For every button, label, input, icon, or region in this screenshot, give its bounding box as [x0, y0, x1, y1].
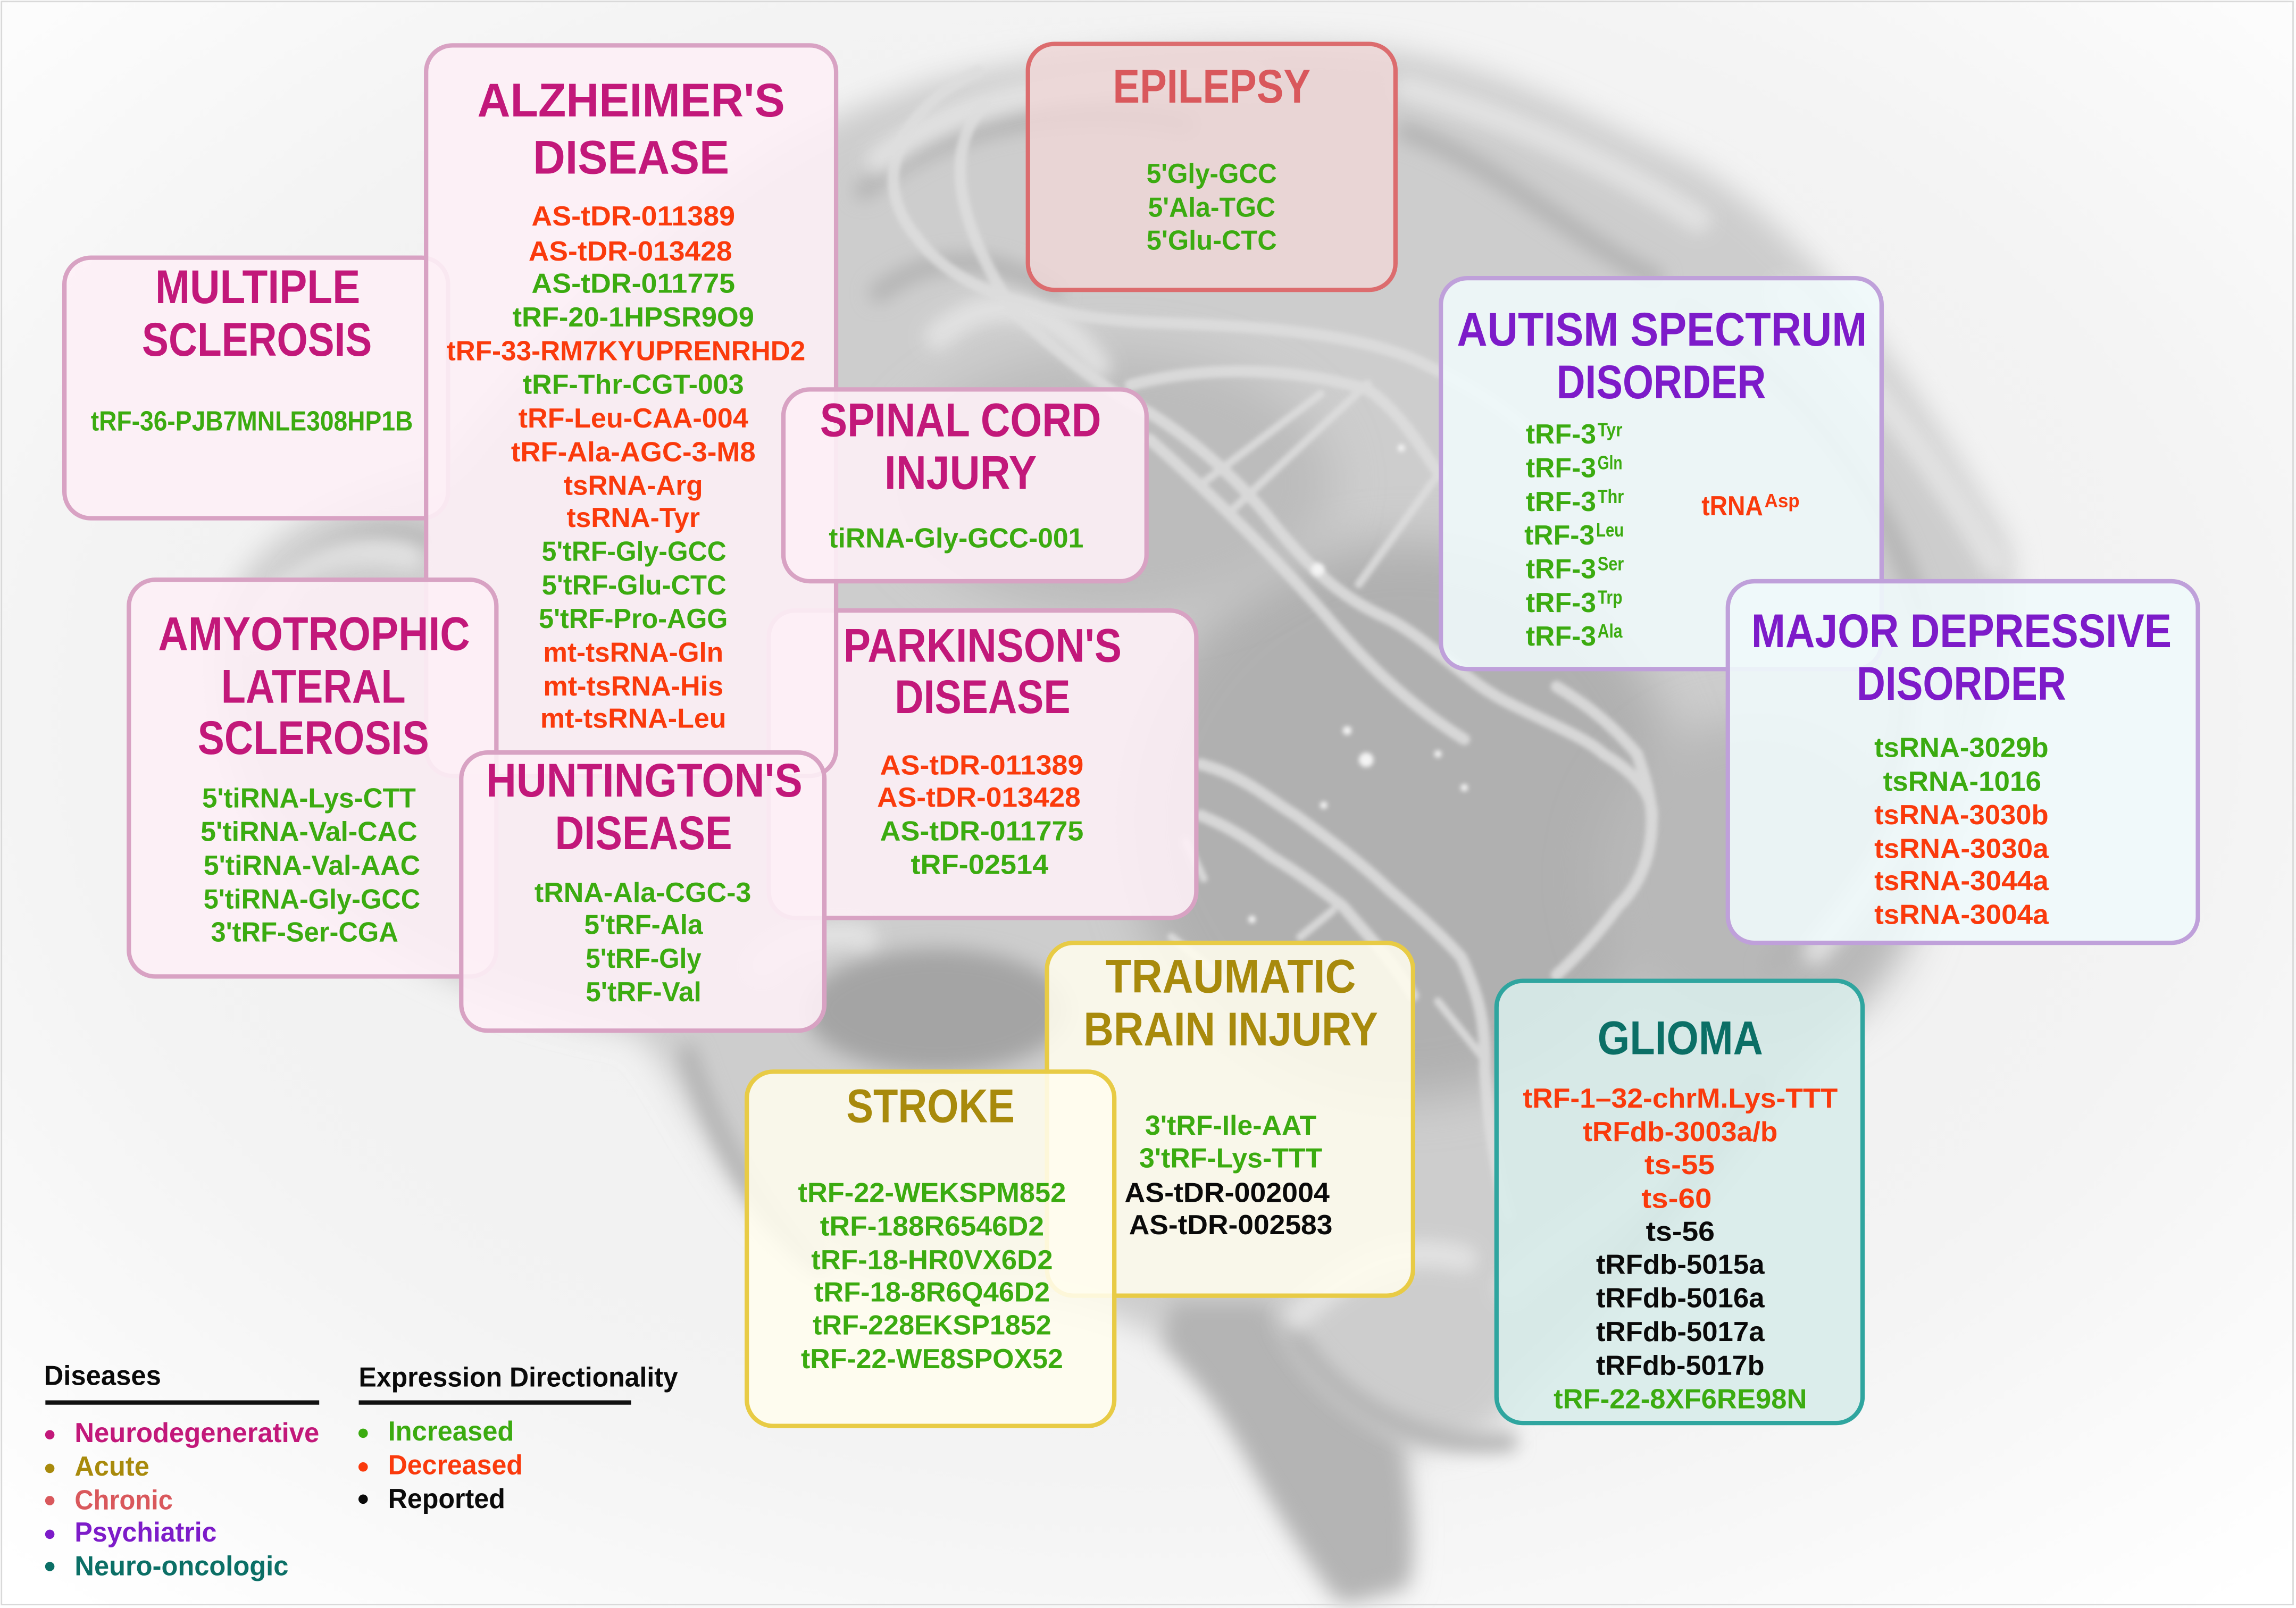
- biomarker list: tRNA-Ala-CGC-3: [535, 877, 751, 908]
- biomarker list: 5'Ala-TGC: [1148, 192, 1275, 223]
- heading: parkinson's disease: [844, 618, 1122, 723]
- biomarker list: ts-56: [1646, 1216, 1715, 1247]
- biomarker list: 3'tRF-Ile-AAT: [1145, 1110, 1316, 1141]
- biomarker list: tsRNA-Tyr: [566, 502, 700, 533]
- biomarker list: tRF-36-PJB7MNLE308HP1B: [91, 406, 413, 437]
- legend: diseases: Diseases: [44, 1361, 161, 1392]
- biomarker: decreased: [1701, 490, 1800, 522]
- legend: diseases: Psychiatric: [74, 1517, 216, 1548]
- biomarker list: tRF-33-RM7KYUPRENRHD2: [447, 336, 805, 366]
- heading: traumatic brain injury: TRAUMATIC: [1106, 950, 1356, 1003]
- biomarker list: tsRNA-3029b: [1874, 732, 2049, 763]
- heading: spinal cord injury: SPINAL CORD: [820, 393, 1101, 446]
- panel: glioma: [1497, 981, 1863, 1423]
- biomarker list: tRF-Ala-AGC-3-M8: [511, 437, 756, 467]
- sparkles: [1248, 445, 1754, 923]
- biomarker list: 5'tRF-Gly: [586, 943, 702, 974]
- biomarker list: increased: tRF-3: [1526, 487, 1596, 517]
- biomarker list: [1147, 158, 1277, 256]
- biomarker list: ts-55: [1644, 1150, 1715, 1180]
- biomarker list: increased: Ala: [1598, 621, 1623, 642]
- heading: traumatic brain injury: BRAIN INJURY: [1083, 1002, 1378, 1056]
- biomarker list: tsRNA-3044a: [1874, 866, 2049, 897]
- dna strands: [894, 72, 1652, 1215]
- biomarker list: 5'tiRNA-Gly-GCC: [204, 884, 420, 915]
- panel: parkinson's disease: [769, 610, 1196, 918]
- biomarker list: tRFdb-5017a: [1596, 1317, 1765, 1347]
- heading: autism spectrum disorder: DISORDER: [1557, 355, 1766, 408]
- biomarker list: tRF-18-HR0VX6D2: [811, 1245, 1053, 1276]
- biomarker list: ts-60: [1641, 1183, 1711, 1214]
- biomarker list: [1124, 1110, 1332, 1241]
- biomarker list: tsRNA-3004a: [1874, 899, 2049, 930]
- biomarker list: 5'tiRNA-Val-CAC: [201, 817, 418, 848]
- biomarker list: tRF-22-WE8SPOX52: [801, 1344, 1063, 1375]
- brain folds: light: [256, 79, 1994, 1318]
- legend: expression directionality: Expression Directionality: [359, 1362, 678, 1393]
- panel: major depressive disorder: [1728, 581, 2198, 943]
- biomarker list: tRF-188R6546D2: [820, 1211, 1044, 1242]
- biomarker list: mt-tsRNA-His: [543, 671, 723, 702]
- heading: alzheimer's disease: DISEASE: [533, 130, 729, 183]
- biomarker list: tRFdb-3003a/b: [1583, 1117, 1777, 1148]
- biomarker list: 5'Glu-CTC: [1147, 225, 1277, 256]
- biomarker list: 5'tiRNA-Val-AAC: [204, 850, 420, 881]
- panel: autism spectrum disorder: [1441, 278, 1882, 669]
- legend: expression directionality: [358, 1362, 678, 1514]
- heading: autism spectrum disorder: AUTISM SPECTRUM: [1457, 303, 1867, 356]
- biomarker list: 3'tRF-Lys-TTT: [1139, 1143, 1322, 1174]
- biomarker list: AS-tDR-002004: [1124, 1177, 1330, 1208]
- biomarker list: increased: tRF-3: [1526, 453, 1596, 484]
- biomarker list: increased: tRF-3: [1526, 588, 1596, 618]
- biomarker list: tiRNA-Gly-GCC-001: [829, 523, 1083, 554]
- biomarker list: tRF-22-WEKSPM852: [798, 1177, 1066, 1208]
- brain stem: [1164, 1303, 1409, 1602]
- heading: amyotrophic lateral sclerosis: AMYOTROPHIC: [158, 607, 470, 660]
- heading: alzheimer's disease: ALZHEIMER'S: [478, 73, 785, 127]
- heading: huntington's disease: [486, 753, 803, 859]
- biomarker list: 5'tiRNA-Lys-CTT: [202, 783, 416, 814]
- biomarker list: mt-tsRNA-Leu: [540, 703, 727, 734]
- biomarker list: increased: Leu: [1596, 520, 1624, 541]
- heading: multiple sclerosis: MULTIPLE: [155, 260, 360, 313]
- biomarker list: [1874, 732, 2049, 930]
- panel: epilepsy: [1028, 44, 1396, 290]
- biomarker list: [798, 1177, 1066, 1375]
- heading: huntington's disease: DISEASE: [555, 806, 732, 859]
- legend: diseases: Neuro-oncologic: [74, 1551, 288, 1581]
- biomarker list: increased: [1524, 419, 1624, 652]
- legend: diseases: Acute: [74, 1451, 149, 1482]
- biomarker list: 5'tRF-Gly-GCC: [542, 537, 727, 567]
- biomarker list: 5'Gly-GCC: [1147, 158, 1277, 189]
- legend: expression directionality: Increased: [388, 1416, 514, 1447]
- biomarker list: AS-tDR-002583: [1129, 1210, 1332, 1241]
- panel: traumatic brain injury: [1047, 943, 1413, 1296]
- biomarker list: increased: Thr: [1598, 486, 1624, 507]
- biomarker list: increased: tRF-3: [1526, 554, 1596, 585]
- biomarker list: 5'tRF-Ala: [585, 910, 703, 941]
- biomarker list: increased: Trp: [1598, 587, 1623, 608]
- biomarker list: tRFdb-5016a: [1596, 1283, 1765, 1314]
- heading: amyotrophic lateral sclerosis: SCLEROSIS: [198, 711, 429, 764]
- panel: multiple sclerosis: [64, 258, 448, 518]
- panel: alzheimer's disease: [426, 45, 836, 776]
- biomarker list: increased: tRF-3: [1526, 621, 1596, 652]
- biomarker: decreased: Asp: [1765, 490, 1800, 512]
- heading: spinal cord injury: INJURY: [884, 446, 1037, 499]
- biomarker list: increased: Tyr: [1598, 419, 1623, 440]
- biomarker: decreased: tRNA: [1701, 491, 1763, 522]
- biomarker list: mt-tsRNA-Gln: [543, 637, 723, 668]
- brain folds: dark: [293, 115, 1921, 1443]
- legend: diseases: [44, 1361, 319, 1581]
- biomarker list: increased: Ser: [1598, 553, 1624, 574]
- biomarker list: 3'tRF-Ser-CGA: [211, 917, 398, 948]
- biomarker list: tRF-Thr-CGT-003: [523, 370, 744, 400]
- legend: expression directionality: Reported: [388, 1484, 505, 1514]
- biomarker list: tRFdb-5015a: [1596, 1249, 1765, 1280]
- biomarker list: AS-tDR-011775: [880, 816, 1083, 847]
- heading: parkinson's disease: PARKINSON'S: [844, 618, 1122, 672]
- panel: huntington's disease: [461, 752, 824, 1031]
- heading: huntington's disease: HUNTINGTON'S: [486, 753, 803, 807]
- heading: major depressive disorder: DISORDER: [1857, 657, 2066, 710]
- biomarker list: [201, 783, 420, 948]
- biomarker list: tRF-18-8R6Q46D2: [814, 1277, 1050, 1308]
- biomarker list: tsRNA-Arg: [564, 471, 703, 501]
- panel: stroke: [747, 1071, 1114, 1426]
- biomarker list: AS-tDR-011775: [531, 269, 735, 299]
- heading: epilepsy: EPILEPSY: [1113, 60, 1310, 113]
- biomarker list: tRF-1–32-chrM.Lys-TTT: [1523, 1083, 1838, 1114]
- biomarker list: tsRNA-3030a: [1874, 833, 2049, 864]
- biomarker list: tsRNA-1016: [1883, 766, 2041, 797]
- biomarker list: AS-tDR-013428: [877, 782, 1081, 813]
- biomarker list: [447, 201, 805, 734]
- heading: autism spectrum disorder: [1457, 303, 1867, 408]
- legend: diseases: Chronic: [74, 1485, 173, 1516]
- heading: amyotrophic lateral sclerosis: [158, 607, 470, 764]
- panel: spinal cord injury: [783, 389, 1147, 581]
- biomarker list: AS-tDR-011389: [531, 201, 735, 232]
- biomarker list: tRF-228EKSP1852: [813, 1310, 1051, 1341]
- heading: traumatic brain injury: [1083, 950, 1378, 1056]
- biomarker list: 5'tRF-Val: [586, 977, 702, 1008]
- heading: multiple sclerosis: [142, 260, 372, 366]
- biomarker list: tRFdb-5017b: [1596, 1350, 1765, 1381]
- biomarker list: tRF-20-1HPSR9O9: [513, 302, 754, 333]
- heading: alzheimer's disease: [478, 73, 785, 183]
- biomarker list: tsRNA-3030b: [1874, 800, 2049, 831]
- biomarker list: [535, 877, 751, 1008]
- biomarker list: [1523, 1083, 1838, 1415]
- legend: expression directionality: Decreased: [388, 1450, 523, 1481]
- heading: major depressive disorder: [1751, 604, 2172, 710]
- heading: spinal cord injury: [820, 393, 1101, 499]
- heading: amyotrophic lateral sclerosis: LATERAL: [221, 660, 406, 713]
- heading: stroke: STROKE: [846, 1079, 1015, 1132]
- biomarker list: increased: tRF-3: [1526, 419, 1596, 450]
- heading: glioma: GLIOMA: [1598, 1011, 1763, 1064]
- legend: diseases: Neurodegenerative: [74, 1418, 319, 1448]
- biomarker list: tRF-Leu-CAA-004: [519, 403, 748, 434]
- biomarker list: increased: Gln: [1598, 452, 1623, 473]
- biomarker list: AS-tDR-011389: [880, 750, 1083, 781]
- heading: parkinson's disease: DISEASE: [895, 670, 1071, 723]
- biomarker list: AS-tDR-013428: [529, 236, 732, 267]
- heading: major depressive disorder: MAJOR DEPRESSIVE: [1751, 604, 2172, 657]
- biomarker list: tRF-22-8XF6RE98N: [1554, 1384, 1807, 1415]
- heading: multiple sclerosis: SCLEROSIS: [142, 313, 372, 366]
- biomarker list: tRF-02514: [911, 850, 1048, 881]
- panel: amyotrophic lateral sclerosis: [129, 580, 496, 976]
- biomarker list: increased: tRF-3: [1524, 520, 1594, 551]
- brain silhouette: [217, 46, 2011, 1600]
- biomarker list: 5'tRF-Glu-CTC: [542, 570, 727, 601]
- biomarker list: 5'tRF-Pro-AGG: [539, 604, 728, 634]
- biomarker list: [877, 750, 1083, 881]
